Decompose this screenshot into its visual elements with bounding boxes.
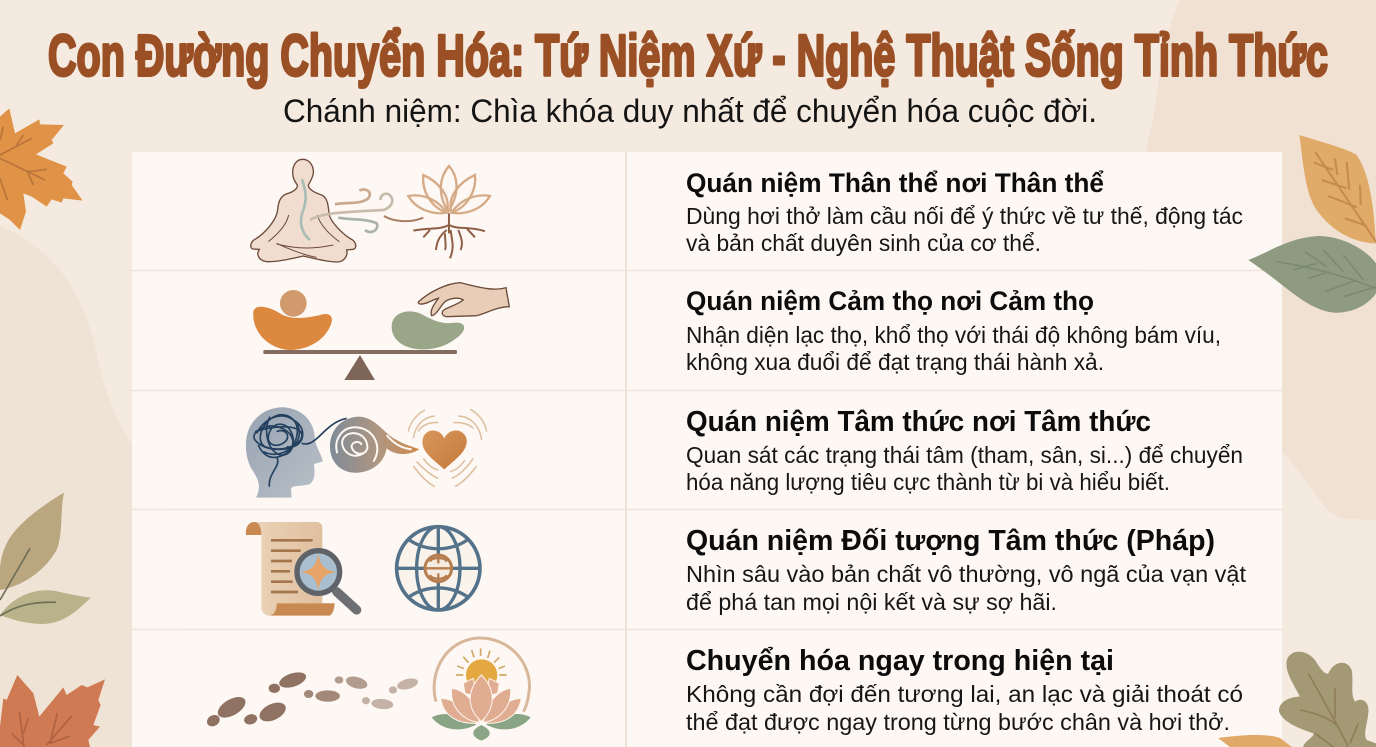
text: row 4: Nhìn sâu vào bản chất vô thường, vô ngã của vạn vật: [686, 561, 1247, 587]
icon: tan leaves left: [0, 493, 91, 624]
text: row 1: [686, 168, 1243, 256]
text: row 1: Dùng hơi thở làm cầu nối để ý thức về tư thế, động tác: [686, 203, 1243, 229]
text: row 4: để phá tan mọi nội kết và sự sợ hãi.: [686, 589, 1057, 615]
icon: globe: [397, 527, 480, 610]
icon: tangled head, spiral and heart: [246, 407, 487, 498]
text: row 3: Quán niệm Tâm thức nơi Tâm thức: [686, 406, 1151, 438]
icon: lotus with sun: [432, 638, 531, 741]
text: row 3: hóa năng lượng tiêu cực thành từ bi và hiểu biết.: [686, 469, 1170, 495]
row 4: dharma: [246, 522, 1247, 616]
text: row 2: không xua đuổi để đạt trạng thái hành xả.: [686, 349, 1104, 375]
icon: footprints: [205, 669, 419, 729]
text: row 4: Quán niệm Đối tượng Tâm thức (Pháp): [686, 525, 1215, 557]
icon: red maple leaf bottom left: [0, 675, 105, 747]
panel: table: [132, 152, 1282, 747]
text: row 5: [686, 645, 1243, 735]
icon: meditating figure, breath and lotus roots: [251, 159, 490, 262]
text: row 4: [686, 525, 1247, 615]
text: row 2: Quán niệm Cảm thọ nơi Cảm thọ: [686, 286, 1094, 316]
icon: balance scale with hand: [253, 283, 509, 380]
text: row 1: và bản chất duyên sinh của cơ thể.: [686, 230, 1041, 256]
text: row 2: [686, 286, 1221, 375]
subtitle: Chánh niệm: Chìa khóa duy nhất để chuyển hóa cuộc đời.: [283, 93, 1097, 129]
row 5: present moment: [205, 638, 1243, 741]
text: row 5: Không cần đợi đến tương lai, an lạc và giải thoát có: [686, 681, 1243, 707]
row 3: mind: [246, 406, 1243, 498]
text: row 5: Chuyển hóa ngay trong hiện tại: [686, 645, 1114, 677]
row 2: feelings: [253, 283, 1221, 380]
text: row 1: Quán niệm Thân thể nơi Thân thể: [686, 168, 1104, 198]
icon: orange leaf bottom edge: [1218, 735, 1292, 747]
text: row 2: Nhận diện lạc thọ, khổ thọ với thái độ không bám víu,: [686, 322, 1221, 348]
text: row 3: Quan sát các trạng thái tâm (tham, sân, si...) để chuyển: [686, 442, 1243, 468]
row 1: body: [251, 159, 1243, 262]
icon: orange maple leaf top left: [0, 108, 83, 230]
icon: oak leaf bottom right: [1279, 652, 1376, 747]
icon: orange leaf top right: [1299, 135, 1376, 243]
text: row 3: [686, 406, 1243, 495]
icon: green leaf right: [1248, 236, 1376, 313]
icon: scroll with magnifier: [246, 522, 357, 616]
text: row 5: thể đạt được ngay trong từng bước chân và hơi thở.: [686, 709, 1230, 735]
